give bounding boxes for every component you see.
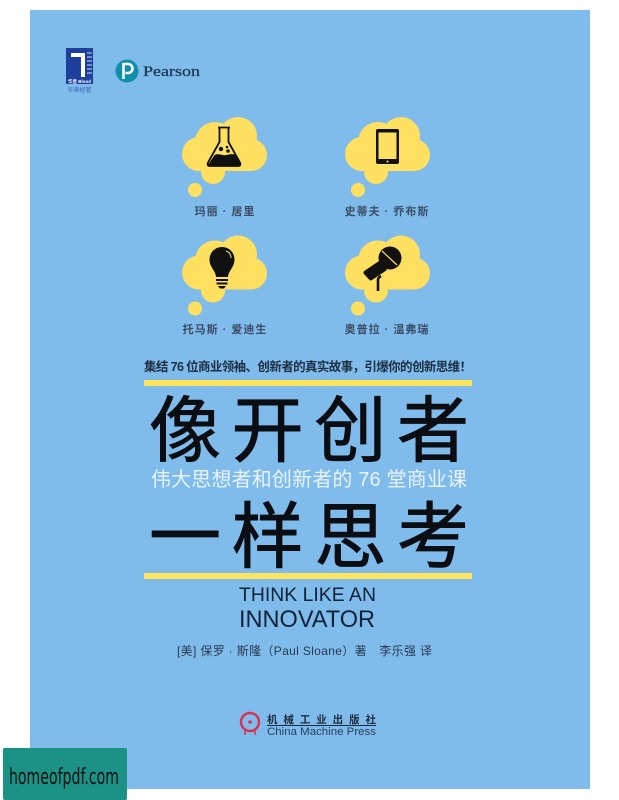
thought cloud: light bulb bbox=[182, 236, 267, 316]
tagline: 集结 76 位商业领袖、创新者的真实故事，引爆你的创新思维！ bbox=[144, 359, 472, 374]
logo: China Machine Press bbox=[241, 713, 377, 738]
thought cloud: tablet bbox=[345, 117, 430, 197]
yellow rule bottom bbox=[144, 573, 472, 579]
logo: China Machine Press: China Machine Press bbox=[267, 726, 377, 738]
label: 史蒂夫·乔布斯: 史蒂夫 · 乔布斯 bbox=[345, 204, 429, 218]
label: 玛丽·居里: 玛丽 · 居里 bbox=[195, 205, 255, 218]
author line: [美] 保罗 · 斯隆（Paul Sloane）著 李乐强 译 bbox=[177, 643, 432, 658]
thought cloud: flask bbox=[182, 117, 267, 197]
yellow rule top bbox=[144, 380, 472, 386]
icon: tablet bbox=[376, 129, 399, 164]
watermark badge bbox=[3, 748, 127, 800]
English title bbox=[239, 585, 376, 633]
label: 奥普拉·温弗瑞: 奥普拉 · 温弗瑞 bbox=[345, 322, 429, 336]
English title: THINK LIKE AN bbox=[239, 585, 376, 606]
label: 托马斯·爱迪生: 托马斯 · 爱迪生 bbox=[183, 322, 267, 336]
title line 2: 一样思考 bbox=[149, 498, 469, 578]
English title: INNOVATOR bbox=[239, 606, 375, 633]
logo: Pearson bbox=[116, 60, 201, 82]
logo: publisher tower: 华章 Blood bbox=[68, 78, 91, 85]
logo: China Machine Press: 机械工业出版社 bbox=[267, 713, 376, 726]
logo: publisher tower bbox=[66, 48, 93, 94]
logo: Pearson: Pearson bbox=[143, 64, 201, 80]
watermark badge: homeofpdf.com bbox=[9, 765, 119, 790]
icon: light bulb bbox=[210, 247, 234, 288]
icon: flask bbox=[208, 128, 241, 166]
subtitle: 伟大思想者和创新者的 76 堂商业课 bbox=[151, 468, 467, 491]
thought cloud: microphone bbox=[345, 236, 430, 316]
icon: microphone bbox=[363, 246, 402, 291]
logo: publisher tower: 华章经管 bbox=[67, 86, 92, 94]
title line 1: 像开创者 bbox=[149, 392, 469, 472]
